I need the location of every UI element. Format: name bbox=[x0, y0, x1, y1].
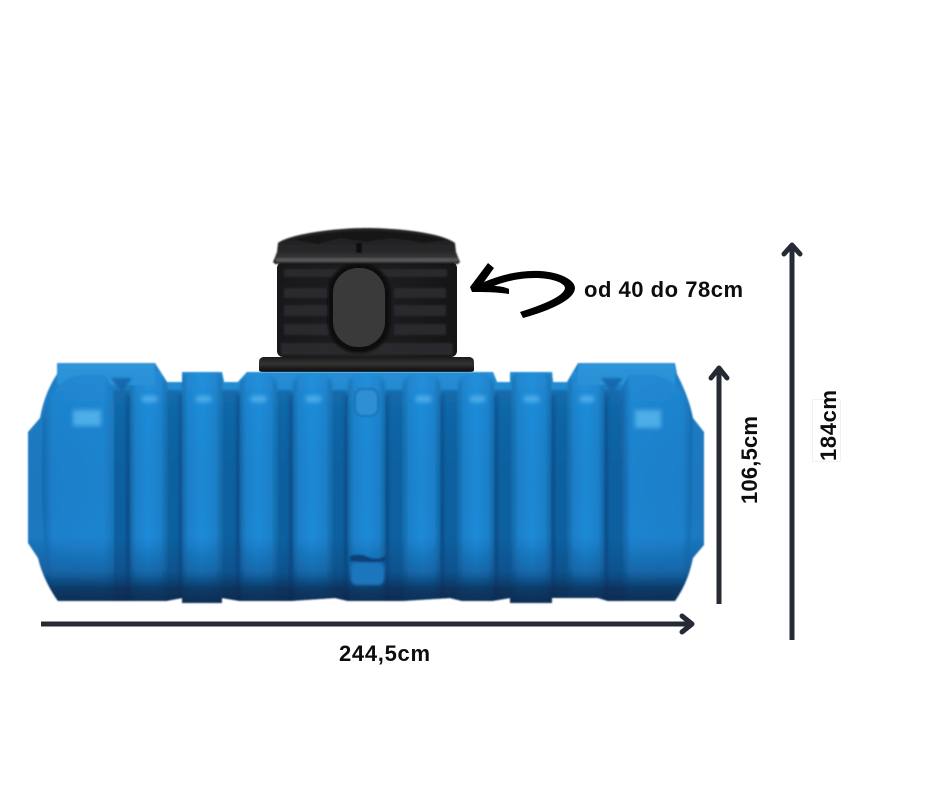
label: tank height 106,5cm: 106,5cm bbox=[737, 416, 762, 504]
lid bbox=[273, 228, 460, 264]
vertical light and dark shading bbox=[20, 360, 720, 605]
riser shaft with lid bbox=[259, 228, 474, 372]
label: total height 184cm: 184cm bbox=[816, 390, 841, 461]
top band between ribs bbox=[156, 372, 577, 390]
ribs bbox=[130, 372, 604, 603]
centre rib slot bbox=[350, 555, 386, 562]
v notches at top of dome bbox=[111, 378, 132, 393]
arrow: total height bbox=[784, 245, 800, 640]
riser body bbox=[277, 262, 457, 357]
tank dimension diagram bbox=[26, 226, 841, 664]
blue tank bbox=[20, 360, 720, 606]
arrow: tank height bbox=[711, 368, 727, 604]
end domes bbox=[42, 376, 115, 578]
dark rib shadows bbox=[126, 395, 608, 600]
label: tank length 244,5cm: 244,5cm bbox=[339, 641, 430, 666]
riser flange bbox=[259, 357, 474, 372]
highlights bbox=[73, 396, 661, 428]
trough shading bbox=[113, 390, 621, 605]
curved arrow pointing to riser bbox=[470, 263, 575, 318]
label: riser height: od 40 do 78cm bbox=[584, 277, 743, 302]
centre rib cap bbox=[355, 389, 378, 416]
top flanges bbox=[57, 363, 155, 385]
arrow: tank length bbox=[41, 616, 692, 632]
